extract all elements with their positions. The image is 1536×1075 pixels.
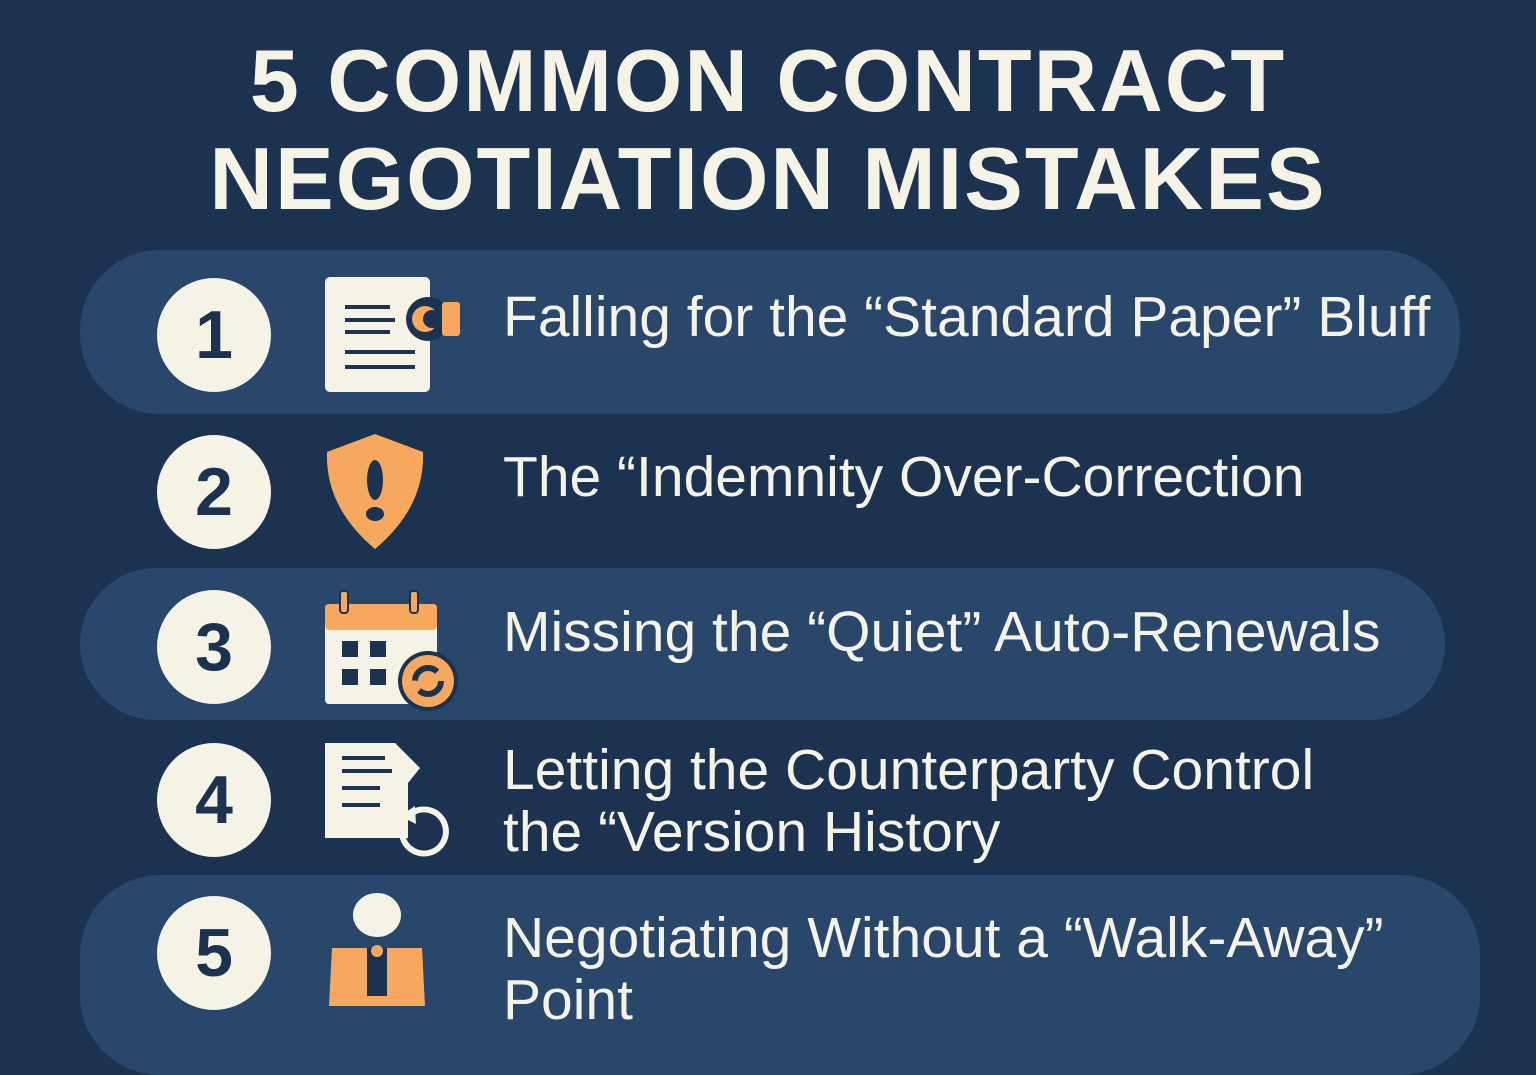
text: item 5: Negotiating Without a “Walk-Away” [503,906,1384,970]
panel: row 5 background [80,875,1480,1075]
text: item 4: Letting the Counterparty Control [503,738,1314,802]
number 5 [157,896,271,1010]
title [209,31,1327,228]
text: item 4: the “Version History [503,800,1000,864]
title: NEGOTIATION MISTAKES [209,129,1327,228]
icon: document with tag [325,277,460,392]
text: item 4 [503,738,1314,864]
number 3 [157,590,271,704]
icon: person [329,893,425,1006]
text: item 2: The “Indemnity Over-Correction [503,445,1304,509]
icon: calendar with renewal [325,590,458,711]
number 1: 1 [195,297,233,373]
number 4: 4 [195,762,233,838]
number 3: 3 [195,609,233,685]
panel: row 1 background [80,250,1460,414]
icon: document with undo arrow [325,743,449,856]
number 5: 5 [195,915,233,991]
number 1 [157,278,271,392]
text: item 5 [503,906,1384,1032]
number 2 [157,435,271,549]
icon: shield with exclamation [326,434,424,549]
number 4 [157,743,271,857]
text: item 5: Point [503,968,633,1032]
number 2: 2 [195,454,233,530]
panel: row 3 background [80,568,1445,720]
text: item 1: Falling for the “Standard Paper” Bluff [503,285,1430,349]
title: 5 COMMON CONTRACT [250,31,1286,130]
text: item 3: Missing the “Quiet” Auto-Renewals [503,600,1381,664]
